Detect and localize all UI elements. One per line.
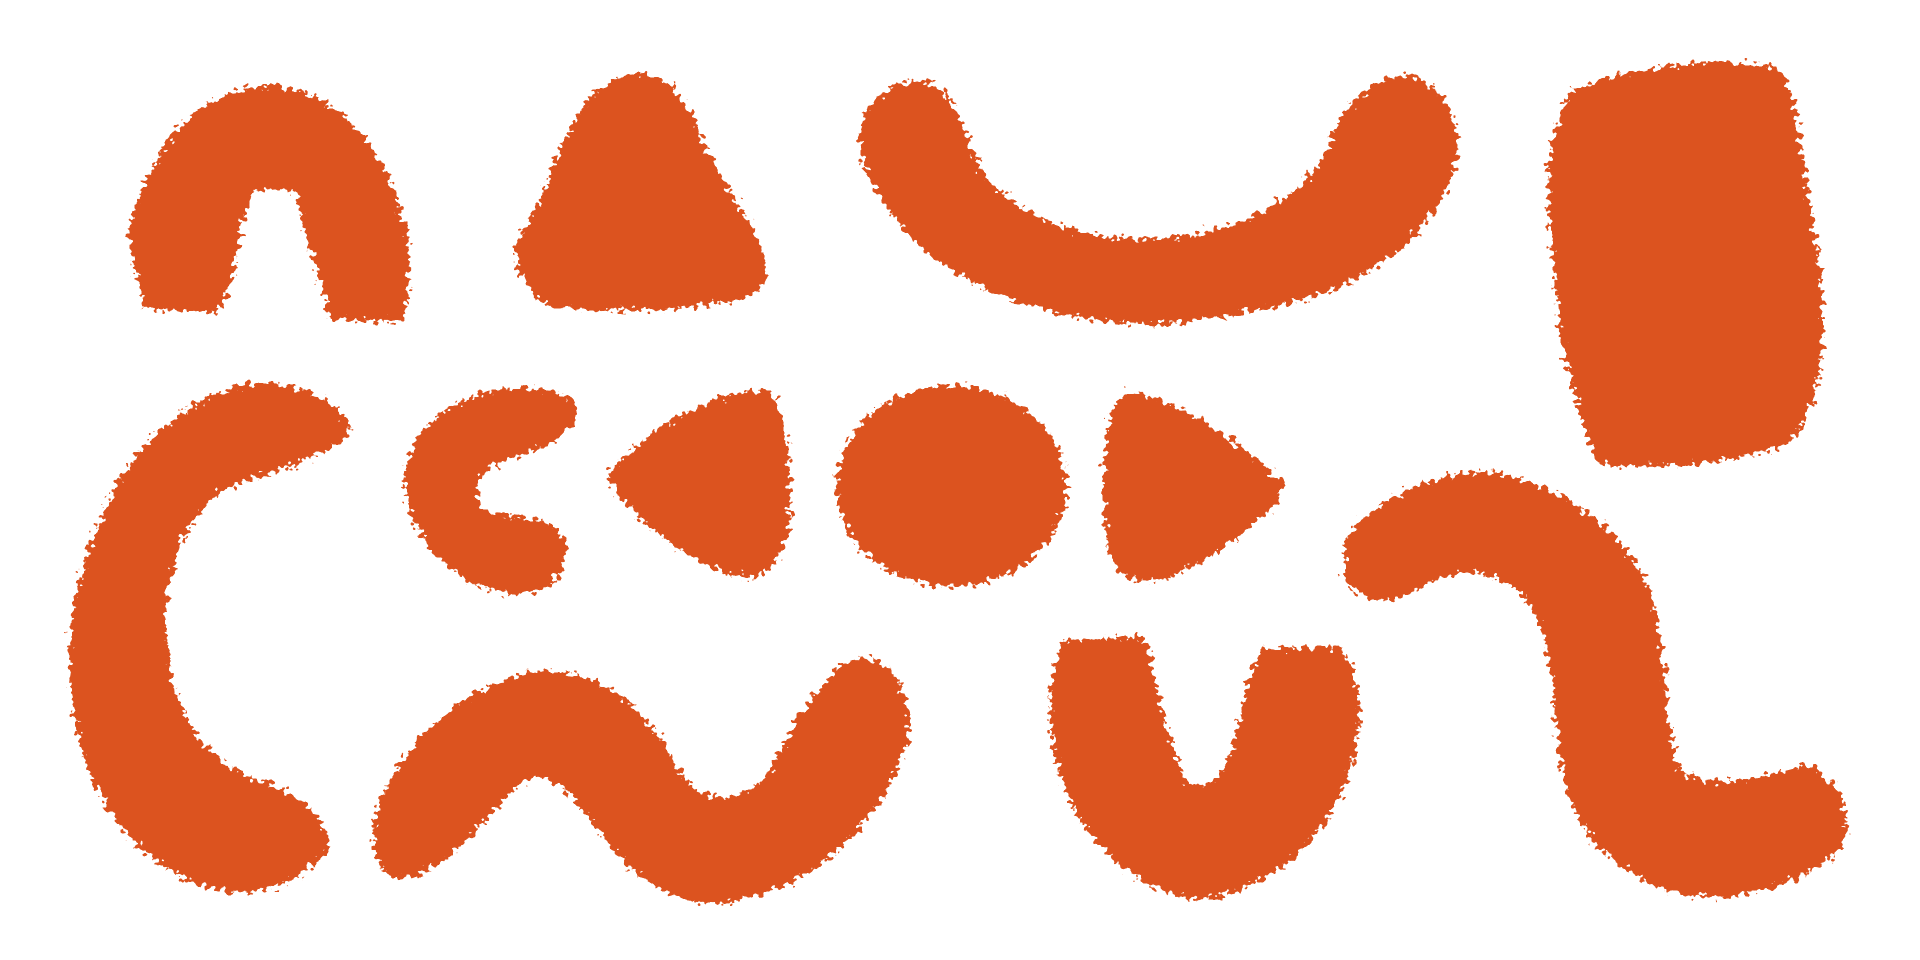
shape: large C curve bbox=[69, 382, 349, 892]
shape: rounded rectangle bbox=[1548, 62, 1823, 466]
shape: small C curve bbox=[404, 389, 578, 594]
shape: smile curve bbox=[859, 76, 1458, 324]
shape: S curve bbox=[1344, 471, 1847, 897]
shape: circle bbox=[836, 386, 1067, 587]
shape: left-pointing triangle bbox=[610, 389, 790, 578]
shape: bottom wave bbox=[373, 658, 909, 904]
shape: rounded triangle top bbox=[514, 73, 767, 310]
shape: arch bbox=[130, 86, 409, 321]
shape: right-pointing triangle bbox=[1104, 392, 1283, 581]
shape: U curve bbox=[1050, 637, 1359, 900]
